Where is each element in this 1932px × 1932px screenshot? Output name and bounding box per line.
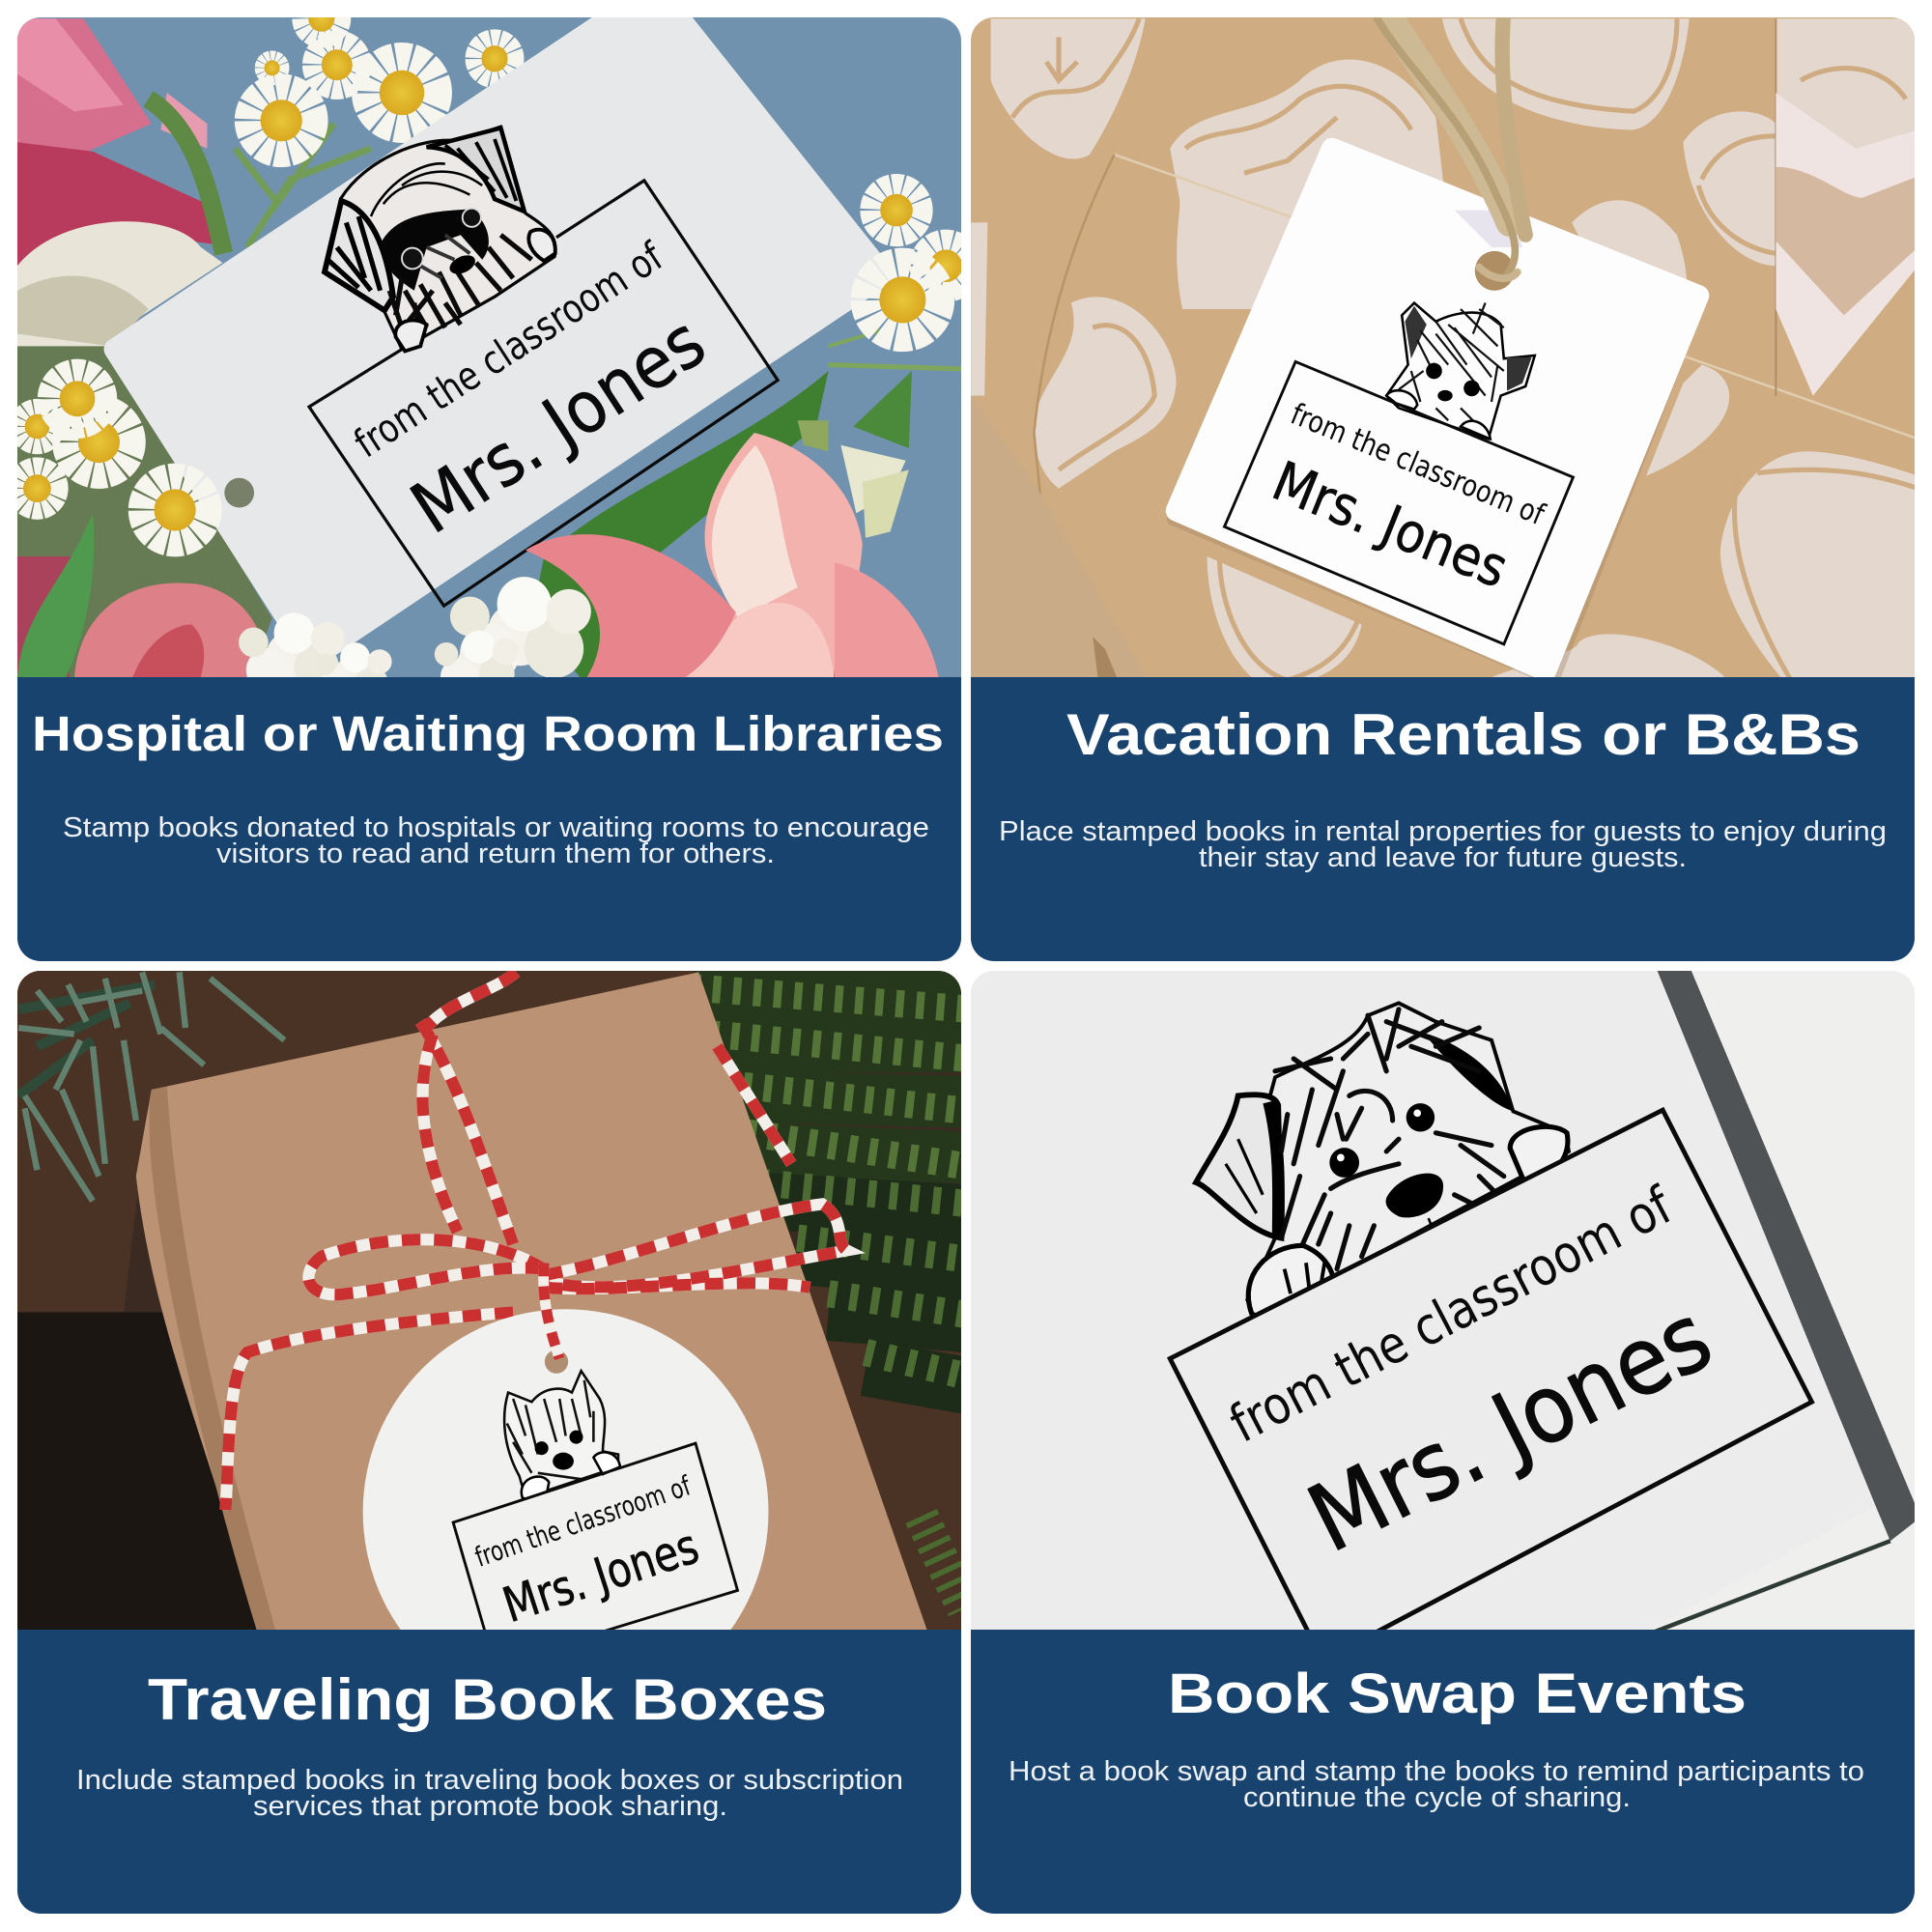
parcel [136, 972, 930, 1640]
stamp text: Mrs. Jones [497, 1518, 705, 1634]
fur [1275, 1009, 1504, 1269]
stamp text: from the classroom of [1220, 1175, 1682, 1455]
description: services that promote book sharing. [253, 1791, 727, 1822]
tag shadow [1167, 357, 1685, 677]
stamp border [451, 1441, 740, 1630]
pine branches [18, 972, 971, 1609]
photo: tag among flowers [17, 17, 961, 677]
dog illustration [325, 127, 555, 352]
heading: Hospital or Waiting Room Libraries [32, 706, 944, 761]
round tag [363, 1309, 769, 1630]
stamp text [1220, 1175, 1727, 1574]
hole [1475, 251, 1515, 291]
twine: band and bows [226, 972, 847, 1510]
stamp border [1225, 361, 1573, 644]
flowers in front [17, 270, 971, 701]
description: continue the cycle of sharing. [1243, 1782, 1631, 1813]
description: Host a book swap and stamp the books to remind participants to [1009, 1756, 1864, 1787]
photo: tag on kraft gift box [966, 0, 1932, 686]
panel: Vacation Rentals or B&Bs [966, 0, 1932, 961]
description [64, 816, 928, 864]
description [999, 816, 1887, 873]
heading: Book Swap Events [1168, 1662, 1747, 1725]
heading: Vacation Rentals or B&Bs [1066, 702, 1861, 767]
dog illustration [504, 1371, 620, 1499]
description: visitors to read and return them for others. [216, 838, 775, 869]
tag card [114, 0, 884, 659]
paws [1248, 1245, 1333, 1318]
stamp text: Mrs. Jones [398, 301, 720, 550]
panel: Book Swap Events [966, 966, 1932, 1914]
left ear [1196, 1094, 1281, 1238]
description: Stamp books donated to hospitals or waiting rooms to encourage [63, 812, 929, 843]
description: Place stamped books in rental properties for guests to enjoy during [999, 816, 1887, 847]
description: Include stamped books in traveling book boxes or subscription [76, 1765, 903, 1796]
panel: Traveling Book Boxes [0, 966, 989, 1914]
book page [966, 966, 1878, 1640]
book spine [1656, 966, 1918, 1541]
stamp text: Mrs. Jones [1293, 1283, 1727, 1574]
photo: stamped book page [966, 966, 1932, 1652]
photo: gift parcel with twine and round tag [17, 971, 961, 1630]
stamp border [1170, 1110, 1812, 1640]
stamp text [475, 1474, 698, 1622]
wrapping paper pattern [971, 18, 1918, 686]
heading: Traveling Book Boxes [148, 1667, 827, 1732]
stamp text: from the classroom of [471, 1469, 696, 1574]
description [1009, 1756, 1864, 1813]
twine [1378, 13, 1525, 278]
caption band [17, 677, 961, 961]
caption band [17, 1630, 961, 1914]
square tag [1177, 149, 1698, 670]
stamp text [1273, 403, 1548, 585]
dog illustration [1196, 1003, 1569, 1319]
hole [224, 478, 254, 507]
caption band [971, 677, 1915, 961]
caption band [971, 1630, 1915, 1914]
panel: Hospital or Waiting Room Libraries [0, 0, 989, 961]
right ear [1424, 1033, 1513, 1111]
dog illustration [1386, 303, 1535, 439]
description [76, 1765, 903, 1822]
stamp text [355, 239, 704, 533]
box fold [1115, 155, 1918, 439]
stamp text: Mrs. Jones [1264, 450, 1516, 601]
stamp text: from the classroom of [1286, 397, 1550, 533]
cut-out heart [1776, 93, 1918, 396]
stamp border [309, 181, 778, 606]
stamp text: from the classroom of [346, 233, 672, 467]
hole and knot strand [544, 1263, 568, 1374]
description: their stay and leave for future guests. [1199, 842, 1687, 873]
